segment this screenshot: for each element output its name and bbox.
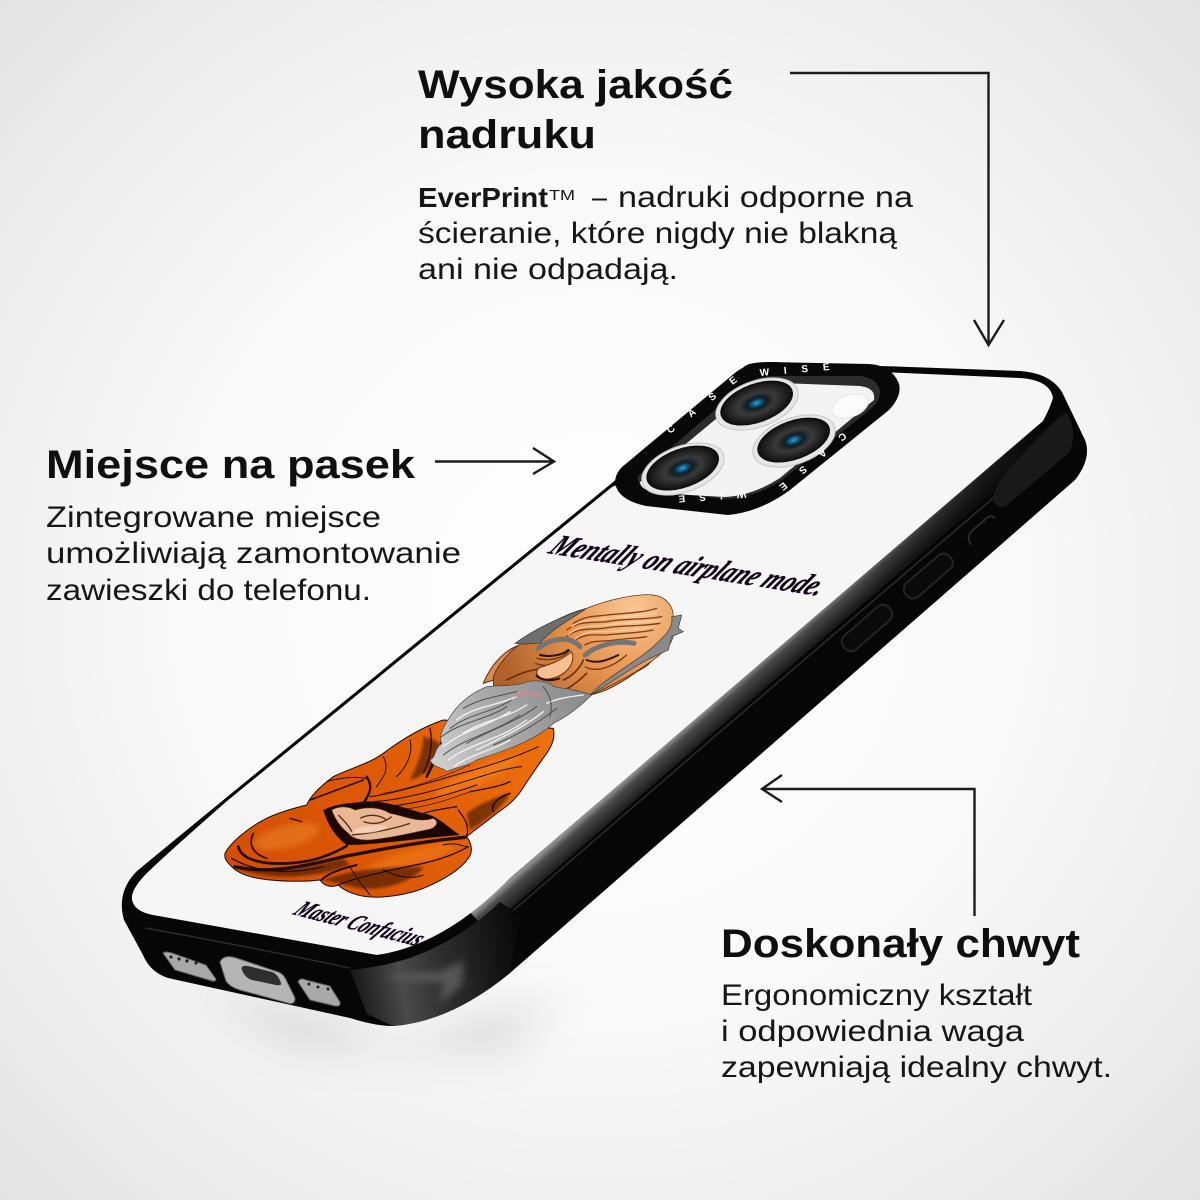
camera ring bbox=[615, 362, 900, 515]
beard dark strands bbox=[442, 687, 557, 755]
corner highlight bbox=[380, 960, 464, 1003]
robe folds bbox=[232, 728, 538, 895]
body text: strap slot bbox=[46, 501, 461, 607]
side inner ridge bbox=[486, 458, 1040, 934]
flash bbox=[828, 389, 872, 423]
monk illustration bbox=[225, 595, 683, 897]
eye sockets bbox=[535, 650, 627, 669]
body text: print quality: ścieranie, które nigdy nie blakną bbox=[418, 217, 897, 250]
callout: grip bbox=[721, 922, 1112, 1084]
right speaker bbox=[298, 979, 340, 1006]
phone case bbox=[122, 362, 1087, 1026]
body text: print quality: TM bbox=[549, 187, 575, 204]
head bbox=[493, 595, 675, 702]
camera module bbox=[615, 362, 900, 515]
shin highlight bbox=[363, 838, 457, 878]
hands bbox=[332, 807, 437, 840]
cheek folds bbox=[507, 660, 587, 697]
print text: Master Confucius: Master Confucius bbox=[287, 896, 433, 951]
bottom rim line bbox=[145, 928, 350, 968]
knee highlight bbox=[252, 818, 322, 856]
ear right bbox=[590, 658, 651, 695]
print text: Mentally on airplane mode: Mentally on airplane mode. bbox=[541, 530, 836, 603]
body text: strap slot: umożliwiają zamontowanie bbox=[46, 537, 461, 570]
sleeve highlight bbox=[431, 750, 523, 803]
phone shadow bbox=[190, 985, 560, 1050]
side button volume down bbox=[838, 602, 896, 654]
side bevel bbox=[470, 418, 1058, 930]
lens right bbox=[746, 405, 842, 477]
lens top bbox=[709, 368, 805, 440]
arrow: strap slot bbox=[435, 448, 554, 474]
nostril shadow bbox=[536, 675, 560, 680]
mouth bbox=[516, 693, 539, 697]
corner gloss bbox=[350, 902, 520, 1026]
charging port bbox=[220, 957, 295, 1003]
body text: strap slot: zawieszki do telefonu. bbox=[46, 574, 371, 607]
closed eyes bbox=[540, 650, 618, 662]
case body bbox=[122, 362, 1087, 1026]
hair left bbox=[515, 608, 587, 644]
heading: grip: Doskonały chwyt bbox=[721, 922, 1080, 966]
brows bbox=[538, 639, 634, 655]
ring lettering top right: W I S E bbox=[759, 362, 830, 379]
body text: print quality bbox=[418, 181, 913, 286]
ring inner wall bbox=[638, 376, 880, 499]
body text: grip: Ergonomiczny kształt bbox=[721, 979, 1033, 1012]
hair right bbox=[590, 615, 683, 695]
camera plate bbox=[640, 383, 874, 497]
nose bbox=[537, 652, 573, 679]
top corner grip bbox=[992, 412, 1073, 507]
beard light strands bbox=[443, 695, 583, 767]
left speaker bbox=[163, 952, 216, 981]
back panel bbox=[132, 372, 1053, 955]
bevel fade bbox=[840, 410, 1065, 612]
beard bbox=[430, 681, 592, 772]
body text: print quality: nadruki odporne na bbox=[618, 181, 913, 214]
heading: print quality: nadruku bbox=[418, 113, 596, 157]
ring lettering right: C A S E bbox=[776, 430, 848, 492]
body text: grip bbox=[721, 979, 1112, 1084]
body text: strap slot: Zintegrowane miejsce bbox=[46, 501, 381, 534]
callout: strap slot bbox=[46, 443, 461, 607]
heading: print quality bbox=[418, 63, 733, 157]
body text: print quality: EverPrint bbox=[418, 182, 548, 213]
arrow: grip bbox=[762, 775, 974, 916]
robe dark shading bbox=[233, 737, 510, 889]
ring lettering bottom: W I S E bbox=[678, 488, 747, 504]
heading: strap slot: Miejsce na pasek bbox=[46, 443, 416, 487]
body text: print quality: ani nie odpadają. bbox=[418, 253, 678, 286]
robe bbox=[225, 720, 554, 897]
wrinkle highlights bbox=[568, 613, 660, 639]
forehead wrinkles bbox=[565, 608, 662, 645]
lens left bbox=[635, 433, 731, 505]
side button volume up bbox=[900, 550, 956, 602]
body text: grip: i odpowiednia waga bbox=[721, 1015, 1024, 1048]
heading: print quality: Wysoka jakość bbox=[418, 63, 733, 107]
arrow: print quality bbox=[790, 73, 1004, 345]
shadow around hands bbox=[323, 801, 460, 845]
ring lettering top: C A S E bbox=[665, 375, 740, 436]
callout: print quality bbox=[418, 63, 913, 286]
body text: print quality: – bbox=[592, 181, 607, 214]
side button small bbox=[969, 516, 995, 545]
ear left bbox=[483, 645, 524, 683]
body text: grip: zapewniają idealny chwyt. bbox=[721, 1051, 1112, 1084]
